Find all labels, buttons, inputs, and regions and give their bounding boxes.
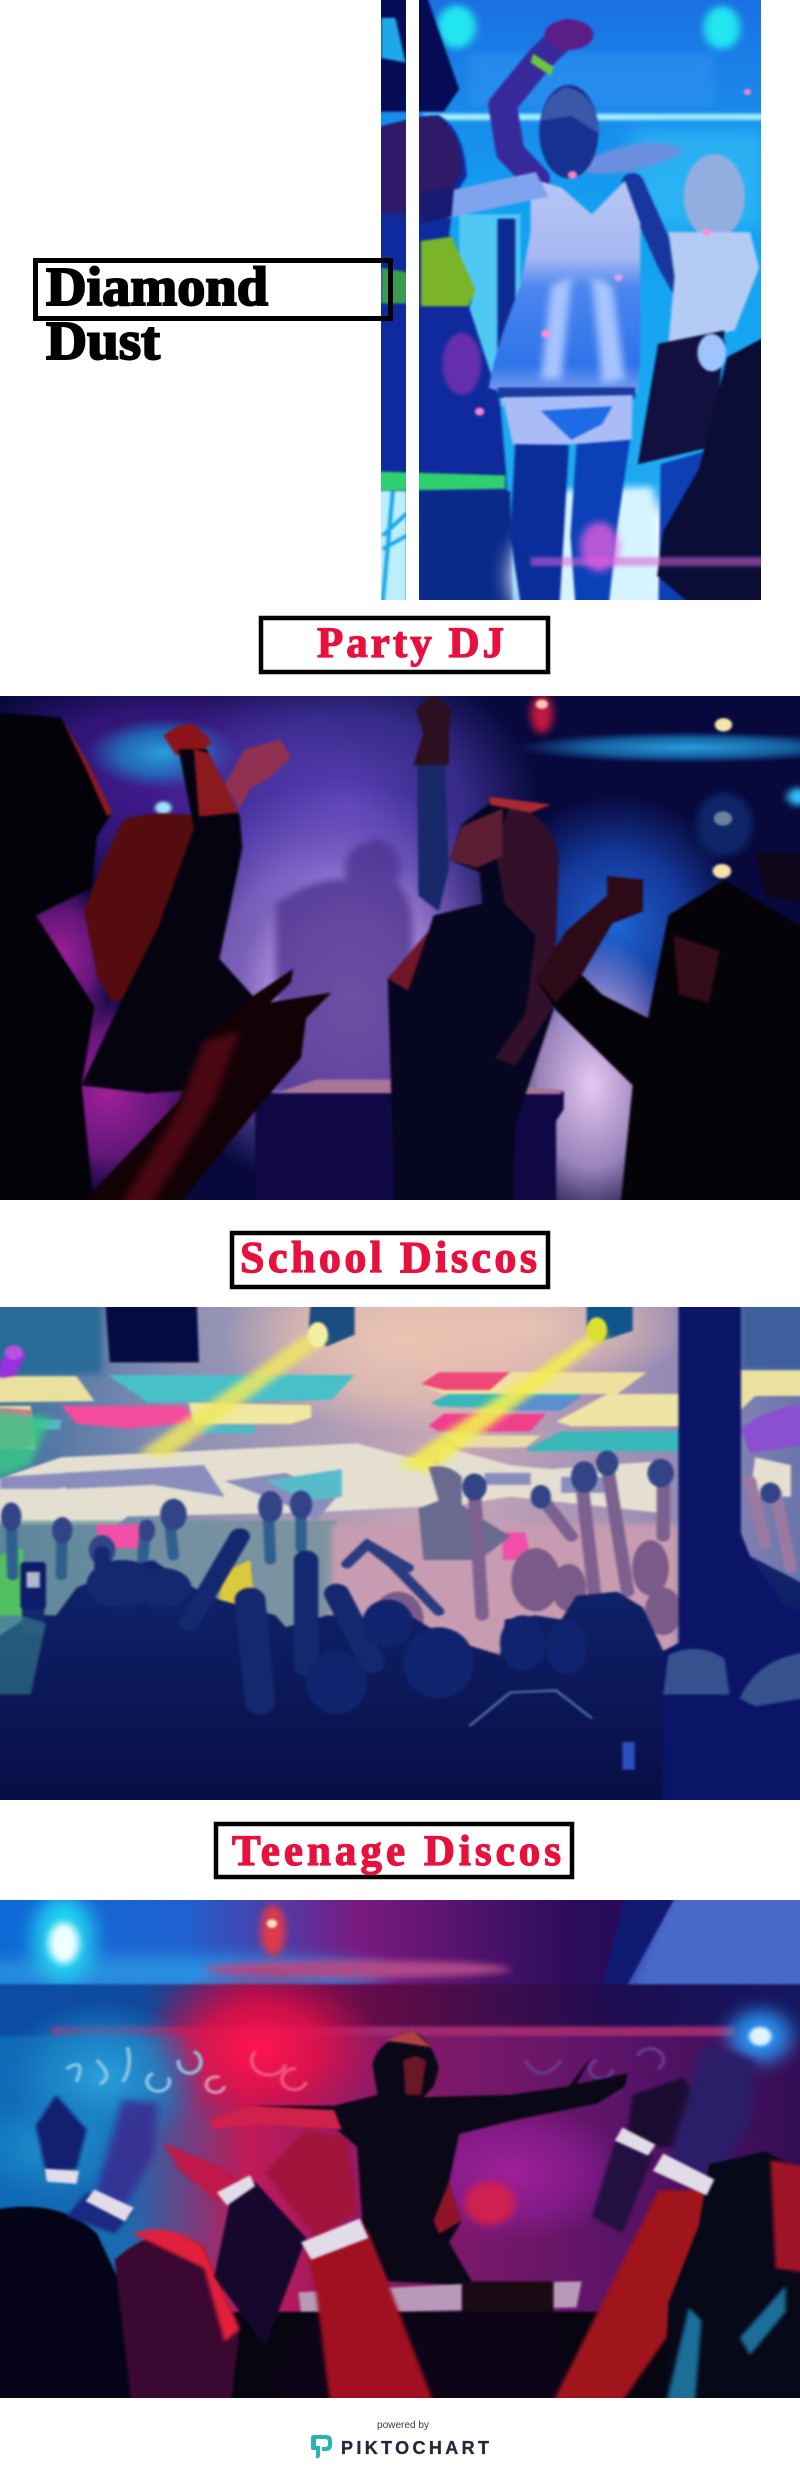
title: Diamond [46, 256, 268, 317]
footer: powered by Piktochart: powered by [377, 2419, 430, 2431]
photo: DJ with arms spread over crowd [0, 1887, 800, 2418]
icon: Piktochart logo [311, 2435, 332, 2458]
heading: School Discos: School Discos [240, 1233, 537, 1282]
heading: Party DJ: Party DJ [317, 620, 504, 667]
footer: powered by Piktochart: PIKTOCHART [341, 2438, 489, 2458]
footer: powered by Piktochart [311, 2419, 489, 2458]
photo: dancers in blue light [381, 0, 761, 600]
title: Dust [46, 310, 161, 371]
heading: Party DJ [261, 618, 548, 672]
photo: school disco crowd and LED stage [0, 1307, 800, 1800]
heading: Teenage Discos: Teenage Discos [232, 1828, 561, 1875]
title [46, 256, 268, 371]
photo: party dancers in purple smoke [0, 696, 800, 1200]
title box [36, 260, 390, 318]
